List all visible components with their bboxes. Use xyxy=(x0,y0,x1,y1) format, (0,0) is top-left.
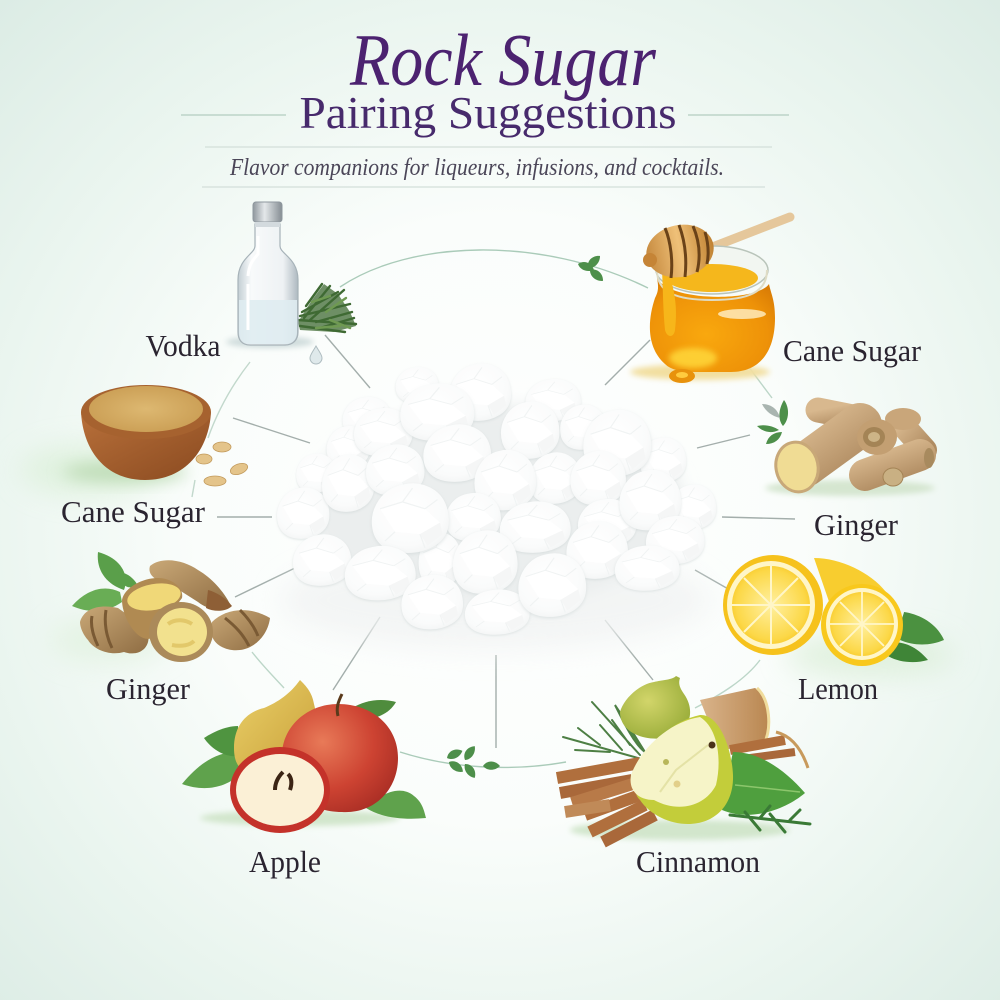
label: Vodka: Vodka xyxy=(146,328,221,363)
tagline: Flavor companions for liqueurs, infusions, and cocktails. xyxy=(229,155,724,181)
sprig: top arc leaves xyxy=(577,253,606,284)
connector lines xyxy=(192,250,795,767)
icon: rock sugar pile xyxy=(277,363,716,650)
icon: wooden bowl with sugar xyxy=(63,385,249,486)
icon: cinnamon and pear xyxy=(557,676,810,842)
icon: vodka bottle xyxy=(226,202,356,364)
label: Lemon: Lemon xyxy=(798,671,878,706)
sprig: bottom arc leaves xyxy=(445,743,500,780)
label: Cinnamon: Cinnamon xyxy=(636,844,760,879)
icon: apples and pear xyxy=(182,680,426,833)
label: Ginger (left): Ginger xyxy=(106,671,191,706)
label: Ginger (right): Ginger xyxy=(814,507,899,542)
icon: lemons xyxy=(723,555,944,666)
rosemary sprig xyxy=(563,702,645,760)
icon: ginger root (right) xyxy=(765,408,935,496)
heading: Pairing Suggestions: Pairing Suggestions xyxy=(300,88,676,138)
icon: ginger root (left) xyxy=(72,552,270,662)
label: Cane Sugar (left): Cane Sugar xyxy=(61,494,206,529)
cinnamon sticks xyxy=(557,740,795,842)
heading: Rock Sugar: Rock Sugar xyxy=(349,20,657,102)
label: Cane Sugar (right): Cane Sugar xyxy=(783,333,922,368)
label: Apple: Apple xyxy=(249,844,321,879)
title xyxy=(181,20,789,187)
sprig: ginger leaves xyxy=(757,400,788,444)
icon: honey jar with dipper xyxy=(630,217,790,383)
